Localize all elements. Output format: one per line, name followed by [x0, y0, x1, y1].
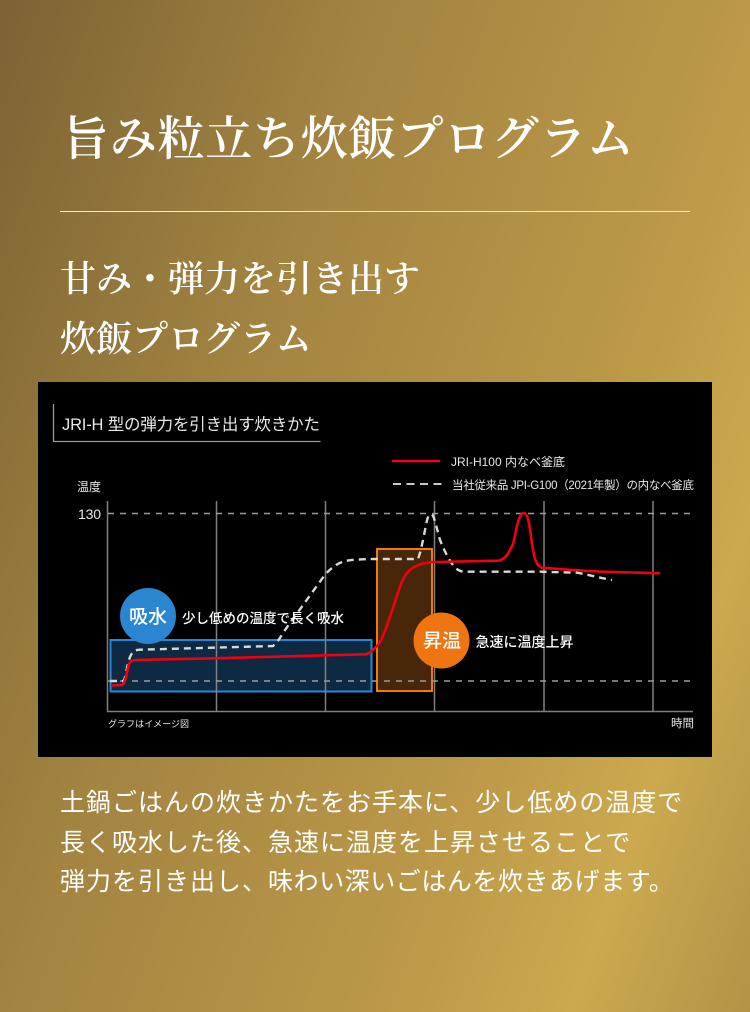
temperature rise zone — [377, 549, 432, 691]
dashed curve: JPI-G100 — [110, 514, 612, 681]
description text — [60, 789, 683, 896]
chart grid — [108, 501, 694, 712]
chart heading: JRI-H 型の弾力を引き出す炊きかた — [62, 415, 320, 434]
callout: absorption: 少し低めの温度で長く吸水 — [182, 611, 344, 626]
axis labels: 130 — [78, 506, 101, 522]
legend: JRI-H100 内なべ釜底 — [451, 455, 565, 469]
legend — [392, 455, 694, 492]
panel: temperature chart — [38, 382, 712, 757]
callout: temperature rise: 昇温 — [423, 630, 461, 652]
callout: absorption — [120, 588, 344, 644]
axis labels: グラフはイメージ図 — [108, 718, 189, 729]
divider line — [60, 211, 690, 212]
description text: 土鍋ごはんの炊きかたをお手本に、少し低めの温度で — [60, 789, 683, 817]
axis labels: 温度 — [77, 480, 101, 494]
axis labels: 時間 — [671, 717, 694, 730]
red curve: JRI-H100 — [112, 513, 660, 686]
title: 旨み粒立ち炊飯プログラム — [62, 114, 635, 166]
description text: 長く吸水した後、急速に温度を上昇させることで — [60, 828, 631, 856]
subheading — [60, 259, 420, 358]
callout: absorption: 吸水 — [129, 606, 167, 628]
legend: 当社従来品 JPI-G100（2021年製）の内なべ釜底 — [452, 478, 694, 492]
chart heading — [54, 404, 320, 442]
axis labels — [77, 480, 694, 730]
subheading: 炊飯プログラム — [60, 318, 312, 358]
callout: temperature rise — [414, 612, 574, 668]
description text: 弾力を引き出し、味わい深いごはんを炊きあげます。 — [60, 868, 674, 896]
absorption zone — [110, 640, 372, 692]
subheading: 甘み・弾力を引き出す — [60, 259, 420, 299]
callout: temperature rise: 急速に温度上昇 — [476, 634, 574, 650]
